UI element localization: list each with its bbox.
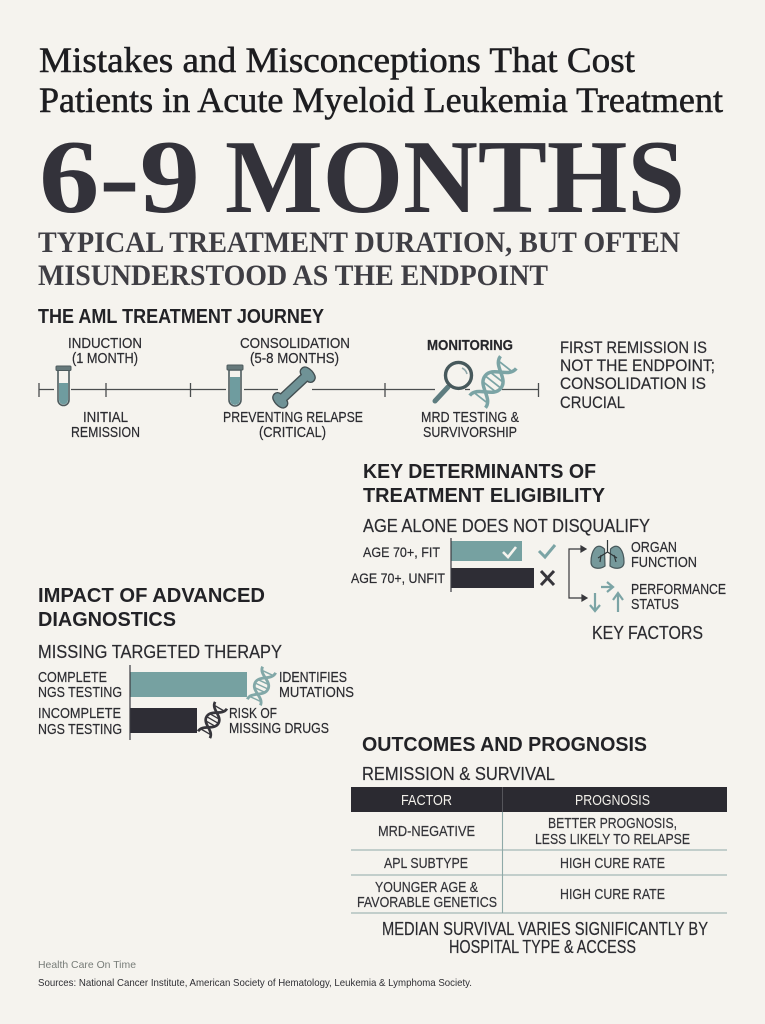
label: induction: (1 MONTH) <box>72 350 138 367</box>
row: APL subtype <box>384 855 665 872</box>
table header: FACTOR <box>401 792 452 809</box>
row: APL subtype: APL SUBTYPE <box>384 855 468 872</box>
panel: outcomes and prognosis <box>351 733 727 957</box>
icon: magnifying glass <box>435 362 472 401</box>
label: preventing relapse: PREVENTING RELAPSE <box>223 409 363 426</box>
icon: teal DNA <box>247 667 276 705</box>
label: key factors: KEY FACTORS <box>592 622 703 643</box>
heading: key determinants <box>363 460 605 507</box>
label: initial remission <box>71 409 140 441</box>
label: performance status <box>631 581 726 613</box>
label: preventing relapse <box>223 409 363 441</box>
label: initial remission: REMISSION <box>71 424 140 441</box>
heading: outcomes: OUTCOMES AND PROGNOSIS <box>362 733 647 756</box>
subheading: age alone: AGE ALONE DOES NOT DISQUALIFY <box>363 515 650 536</box>
bar chart: age and fitness: AGE 70+, UNFIT <box>351 570 445 586</box>
row: MRD-negative <box>378 815 690 848</box>
row: younger age and favorable genetics: HIGH CURE RATE <box>560 886 665 903</box>
label: organ function: FUNCTION <box>631 554 697 571</box>
heading: treatment journey: THE AML TREATMENT JOURNEY <box>38 305 324 328</box>
bar chart: NGS testing: INCOMPLETE <box>38 705 121 722</box>
label: identifies mutations <box>279 669 354 701</box>
footer: sources: Sources: National Cancer Institute, American Society of Hematology, Leukemia & Lymphoma Society. <box>38 977 472 989</box>
panel: impact of advanced diagnostics <box>38 584 354 740</box>
label: identifies mutations: IDENTIFIES <box>279 669 347 686</box>
footer: brand: Health Care On Time <box>38 959 136 971</box>
label: preventing relapse: (CRITICAL) <box>259 424 326 441</box>
callout: first remission <box>560 338 715 412</box>
label: organ function <box>631 539 697 571</box>
note: median survival <box>382 919 708 957</box>
row: MRD-negative: LESS LIKELY TO RELAPSE <box>535 831 690 848</box>
table header <box>351 787 727 812</box>
bracket arrows <box>569 546 587 601</box>
panel: key determinants of treatment eligibility <box>351 460 726 643</box>
statistic subtitle <box>38 226 680 292</box>
label: risk of missing drugs <box>229 705 329 737</box>
label: MRD testing and survivorship <box>421 409 519 441</box>
bar chart: age and fitness: AGE 70+, FIT <box>363 544 440 560</box>
table header: PROGNOSIS <box>575 792 650 809</box>
label: MRD testing and survivorship: MRD TESTING & <box>421 409 519 426</box>
icon: consolidation test tube <box>227 365 243 406</box>
headline statistic: 6-9 months: MONTHS <box>225 118 685 235</box>
heading: impact: IMPACT OF ADVANCED <box>38 584 265 607</box>
callout: first remission: CRUCIAL <box>560 393 625 412</box>
label: identifies mutations: MUTATIONS <box>279 684 354 701</box>
bar chart: age and fitness <box>351 538 534 592</box>
label: consolidation: CONSOLIDATION <box>240 335 350 352</box>
row: younger age and favorable genetics <box>357 879 665 911</box>
panel: AML treatment journey <box>38 305 715 441</box>
title: Mistakes and Misconceptions That Cost <box>39 40 635 80</box>
callout: first remission: FIRST REMISSION IS <box>560 338 707 357</box>
callout: first remission: CONSOLIDATION IS <box>560 374 706 393</box>
icon: performance arrows <box>590 582 623 612</box>
label: performance status: STATUS <box>631 596 679 613</box>
icon: dark DNA <box>198 702 227 738</box>
subheading: remission and survival: REMISSION & SURVIVAL <box>362 763 555 784</box>
label: MRD testing and survivorship: SURVIVORSHIP <box>423 424 517 441</box>
table: prognosis factors <box>351 787 727 913</box>
heading: impact: DIAGNOSTICS <box>38 608 176 631</box>
label: consolidation: (5-8 MONTHS) <box>250 350 339 367</box>
icon: bone <box>270 365 318 410</box>
headline statistic: 6-9 months: 6-9 <box>39 118 200 235</box>
icon: teal DNA helix <box>470 356 516 408</box>
icon: lungs <box>591 540 624 568</box>
label: induction: INDUCTION <box>68 335 142 352</box>
note: median survival: HOSPITAL TYPE & ACCESS <box>449 937 636 957</box>
icon: induction test tube <box>56 366 71 406</box>
label: performance status: PERFORMANCE <box>631 581 726 598</box>
subheading: missing targeted therapy: MISSING TARGETED THERAPY <box>38 641 282 662</box>
title: Patients in Acute Myeloid Leukemia Treatment <box>39 80 723 120</box>
row: younger age and favorable genetics: YOUNGER AGE & <box>375 879 478 896</box>
bar chart: NGS testing: NGS TESTING <box>38 721 122 738</box>
label: risk of missing drugs: MISSING DRUGS <box>229 720 329 737</box>
heading: key determinants: TREATMENT ELIGIBILITY <box>363 484 605 507</box>
statistic subtitle: TYPICAL TREATMENT DURATION, BUT OFTEN <box>38 226 680 259</box>
icon: teal check <box>539 545 555 557</box>
row: MRD-negative: BETTER PROGNOSIS, <box>548 815 677 832</box>
title <box>39 40 723 120</box>
row: APL subtype: HIGH CURE RATE <box>560 855 665 872</box>
row: younger age and favorable genetics: FAVORABLE GENETICS <box>357 894 497 911</box>
bar chart: NGS testing: NGS TESTING <box>38 684 122 701</box>
icon: dark cross <box>541 571 554 585</box>
heading: key determinants: KEY DETERMINANTS OF <box>363 460 596 483</box>
label: induction <box>68 335 142 367</box>
callout: first remission: NOT THE ENDPOINT; <box>560 356 715 375</box>
timeline <box>39 383 538 397</box>
row: MRD-negative: MRD-NEGATIVE <box>378 823 475 840</box>
statistic subtitle: MISUNDERSTOOD AS THE ENDPOINT <box>38 259 548 292</box>
bar chart: NGS testing <box>38 665 247 740</box>
label: consolidation <box>240 335 350 367</box>
bar chart: NGS testing: COMPLETE <box>38 669 107 686</box>
label: risk of missing drugs: RISK OF <box>229 705 277 722</box>
label: initial remission: INITIAL <box>83 409 128 426</box>
heading: impact <box>38 584 265 631</box>
label: organ function: ORGAN <box>631 539 677 556</box>
label: monitoring: MONITORING <box>427 337 513 354</box>
